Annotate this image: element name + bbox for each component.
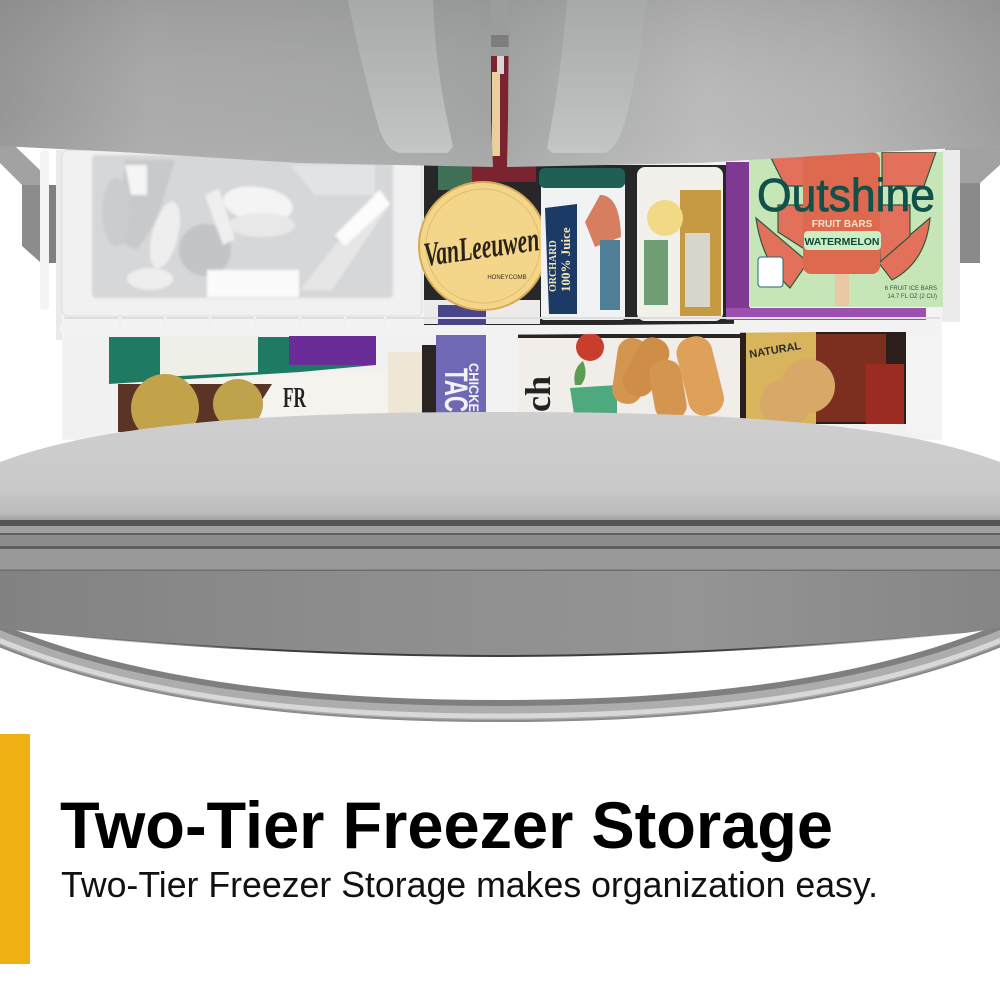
- lower tier food packages: [64, 332, 936, 442]
- yellow accent bar: [0, 734, 30, 964]
- natural snack box: NATURAL: [748, 340, 802, 361]
- upper doors: [0, 0, 1000, 168]
- juice can: orchard: [539, 168, 625, 320]
- right handle: [547, 0, 647, 153]
- chicken tender box: ch: [518, 376, 558, 412]
- upper tier: Van Leeuwen lid: HONEYCOMB: [487, 275, 527, 281]
- ice bin: [62, 150, 422, 316]
- popsicle: [803, 152, 880, 274]
- drawer front bands: [0, 520, 1000, 571]
- watermelon wedges: [756, 152, 936, 288]
- left handle: [348, 0, 453, 153]
- chicken tender box: [518, 332, 740, 424]
- watermelon label: WATERMELON: [804, 236, 880, 248]
- brand text: VanLeeuwen: [422, 221, 542, 274]
- freezer drawer interior: [62, 150, 942, 440]
- title: Two-Tier Freezer Storage: [60, 788, 833, 862]
- green and purple package: [109, 336, 376, 384]
- chicken tenders: [610, 332, 727, 422]
- juice can: lemonade: [637, 167, 723, 321]
- fruit bars text: FRUIT BARS: [812, 219, 873, 230]
- Outshine box: [726, 152, 943, 320]
- natural snack box: [740, 332, 906, 429]
- logo text: Outshine: [757, 169, 935, 221]
- Outshine box: 14.7 FL OZ (2 CU): [888, 294, 937, 300]
- upper tier: Van Leeuwen lid: [419, 182, 547, 310]
- freezer side brackets and rails: [0, 146, 1000, 340]
- drawer handle bar: [0, 627, 1000, 721]
- watermelon label: [804, 231, 881, 250]
- drawer top surface: [0, 412, 1000, 522]
- left door: [0, 0, 493, 167]
- door gap: [490, 0, 510, 168]
- Outshine box: 6 FRUIT ICE BARS: [885, 286, 937, 292]
- taco box: [436, 335, 486, 413]
- no gmo badge: [758, 257, 783, 287]
- taco box: CHICKE: [466, 363, 482, 412]
- rice box: FR: [283, 383, 306, 414]
- ice cubes: [92, 155, 393, 298]
- taco box: TAC: [438, 368, 474, 412]
- juice can: orchard: ORCHARD: [548, 240, 559, 292]
- drawer lower panel: [0, 571, 1000, 656]
- wire shelf rail: [60, 316, 940, 331]
- lower drawer front: [0, 412, 1000, 656]
- juice can: orchard: 100% Juice: [558, 227, 573, 292]
- subtitle: Two-Tier Freezer Storage makes organization easy.: [61, 864, 878, 905]
- right door: [507, 0, 1000, 167]
- rice box: [118, 370, 388, 442]
